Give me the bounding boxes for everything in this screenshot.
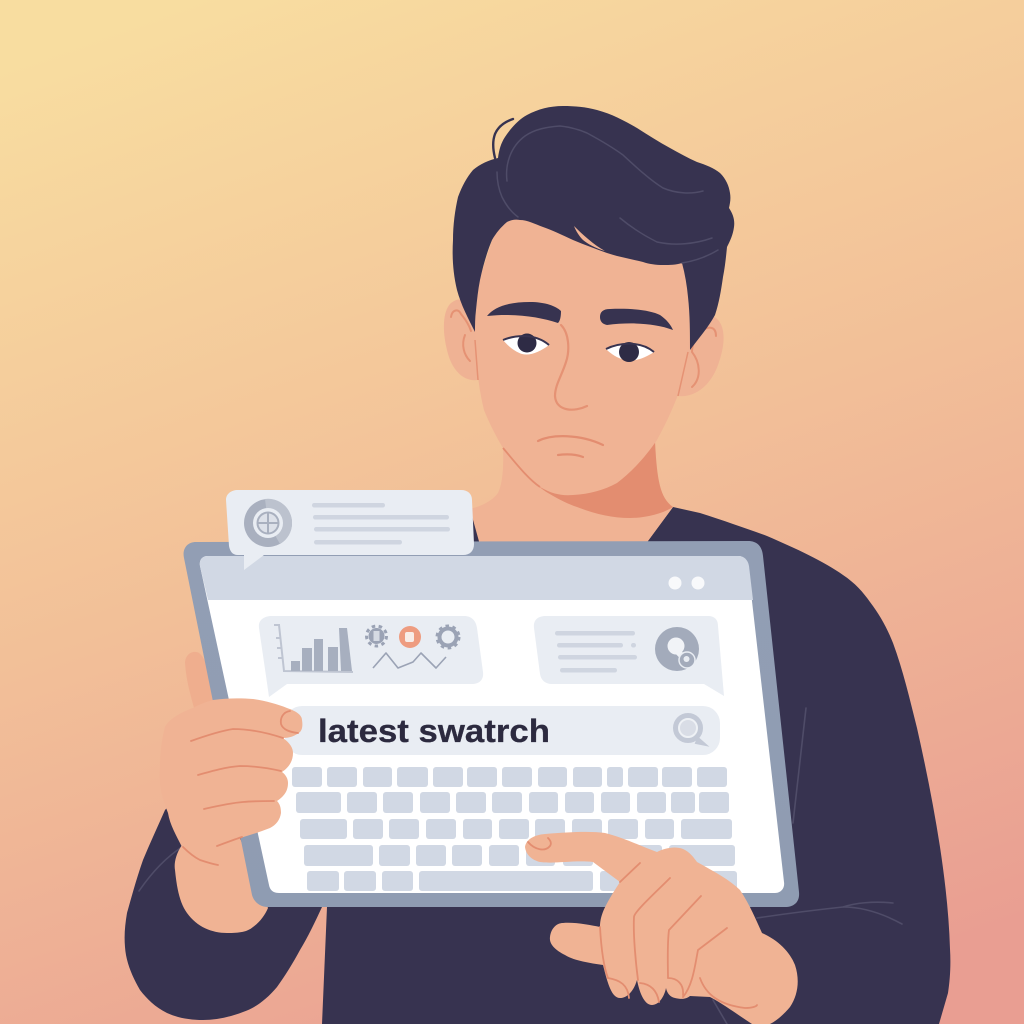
- face: [475, 215, 692, 495]
- icon: gear left: [366, 626, 386, 646]
- forelock gap: [574, 226, 605, 251]
- sleeve crease lines: [139, 708, 902, 1024]
- left eye: [503, 334, 549, 355]
- left ear: [444, 299, 478, 380]
- icon: disc with badge: [655, 627, 699, 671]
- tablet: [184, 541, 799, 907]
- icon: globe badge: [244, 499, 292, 547]
- hair curl: [493, 119, 513, 158]
- left hand: [160, 698, 302, 865]
- bar chart: [274, 625, 353, 672]
- notification text lines: [312, 503, 450, 544]
- right eye: [606, 342, 654, 362]
- face side lines: [475, 340, 688, 396]
- person's torso and sleeves: [125, 507, 950, 1024]
- browser header bar: [200, 556, 753, 600]
- top notification bubble: [226, 490, 474, 570]
- icon: gear right: [437, 626, 459, 648]
- tablet screen: [200, 556, 784, 893]
- left forearm: [175, 838, 268, 933]
- finger crease lines: [600, 863, 757, 1008]
- left eyebrow: [487, 302, 561, 323]
- icon: magnifier: [676, 716, 706, 745]
- tablet frame: [184, 541, 799, 907]
- neck: [470, 440, 673, 545]
- icon: orange badge: [399, 626, 421, 648]
- finger crease lines: [183, 729, 283, 865]
- right ear: [678, 316, 724, 396]
- hair highlight strands: [497, 126, 718, 263]
- fingernails: [528, 838, 683, 1002]
- mouth: [538, 436, 603, 457]
- on-screen keyboard: [292, 767, 737, 891]
- thumbnail: [281, 711, 298, 733]
- search bar: [285, 706, 720, 755]
- text bubble right: [534, 616, 724, 696]
- icon: thumb base behind tablet: [185, 652, 222, 722]
- search text: latest swatrch: [318, 713, 550, 749]
- jaw line: [503, 448, 540, 487]
- nose: [555, 325, 587, 410]
- right hand pointing at keyboard: [525, 832, 798, 1024]
- neck shadow: [503, 442, 673, 518]
- hair: [453, 106, 734, 350]
- line chart: [373, 653, 446, 668]
- bubble text lines: [555, 631, 637, 672]
- right eyebrow: [600, 309, 673, 330]
- window control dots: [668, 576, 704, 590]
- chart bubble: [259, 616, 483, 697]
